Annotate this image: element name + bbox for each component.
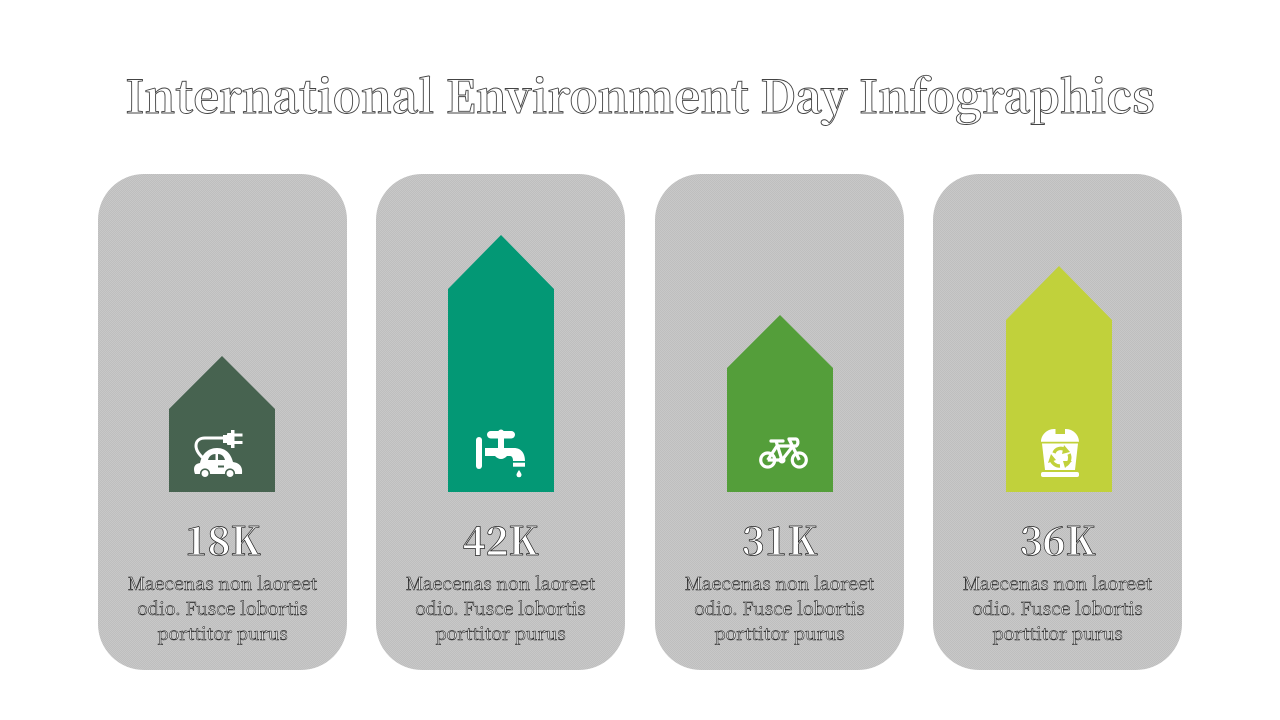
description [963,571,1152,646]
arrow bar: dark green [169,356,275,492]
arrow bar: green [727,315,833,492]
description: porttitor purus [714,621,845,646]
panel: bicycle 31K [655,174,904,670]
description [685,571,874,646]
icon: bicycle [759,437,808,469]
icon: water tap [476,430,525,478]
description: porttitor purus [435,621,566,646]
value: 42K [463,511,538,567]
value: 36K [1020,511,1095,567]
icon: electric car [194,430,242,477]
description [406,571,596,646]
panel: electric car 18K [98,174,347,670]
description: porttitor purus [157,621,288,646]
icon: recycling bin [1041,429,1079,477]
description: Maecenas non laoreet [406,571,595,596]
panel: water tap 42K [376,174,625,670]
description: odio. Fusce lobortis [137,596,308,621]
description: Maecenas non laoreet [963,571,1152,596]
description: odio. Fusce lobortis [972,596,1143,621]
arrow bar: teal [448,235,554,492]
description: Maecenas non laoreet [128,571,317,596]
description [128,571,318,646]
title: International Environment Day Infographics [125,61,1155,126]
description: odio. Fusce lobortis [415,596,586,621]
value: 18K [185,511,260,567]
description: odio. Fusce lobortis [694,596,865,621]
description: porttitor purus [992,621,1123,646]
arrow bar: lime [1006,266,1112,492]
value: 31K [742,511,817,567]
description: Maecenas non laoreet [685,571,874,596]
panel: recycling bin 36K [933,174,1182,670]
